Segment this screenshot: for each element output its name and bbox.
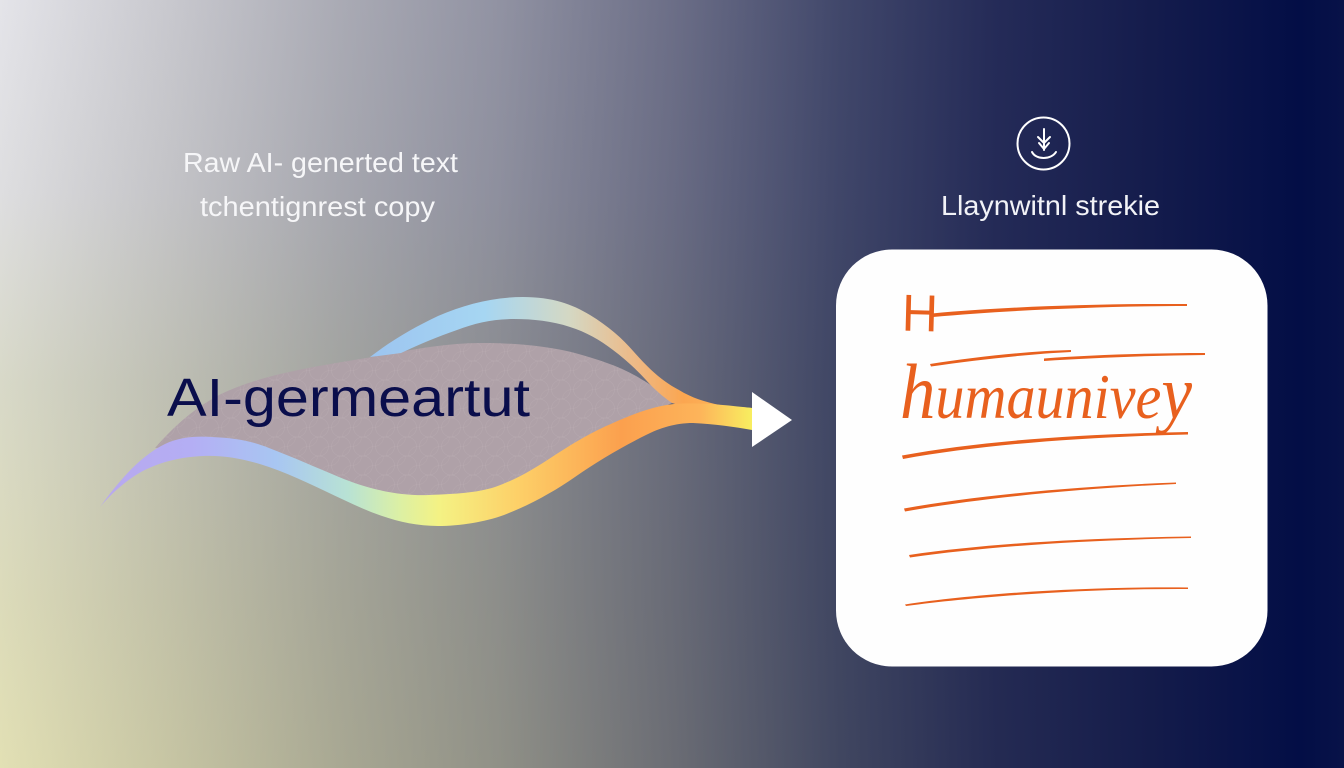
lower gradient ribbon (100, 403, 752, 526)
panel: white humanized document card (836, 250, 1268, 666)
top-left caption: raw AI text: Raw AI- generted text (183, 147, 458, 178)
upper gradient ribbon (370, 297, 752, 420)
top-left caption: raw AI text (183, 147, 458, 222)
handwritten word: humaunivey (900, 348, 1192, 435)
textured leaf shape (155, 343, 672, 505)
handwritten heading H and strokes (901, 285, 1205, 366)
handwritten heading H and strokes: H (901, 285, 939, 343)
top-right caption: Llaynwitnl strekie (941, 190, 1160, 221)
handwritten lines (902, 432, 1191, 606)
flow diagram: AI text ribbon into arrow (100, 297, 792, 526)
icon: download in circle (1018, 118, 1070, 170)
ribbon label: AI-germeartut (167, 368, 530, 428)
top-left caption: raw AI text: tchentignrest copy (200, 191, 435, 222)
arrowhead (752, 392, 792, 447)
